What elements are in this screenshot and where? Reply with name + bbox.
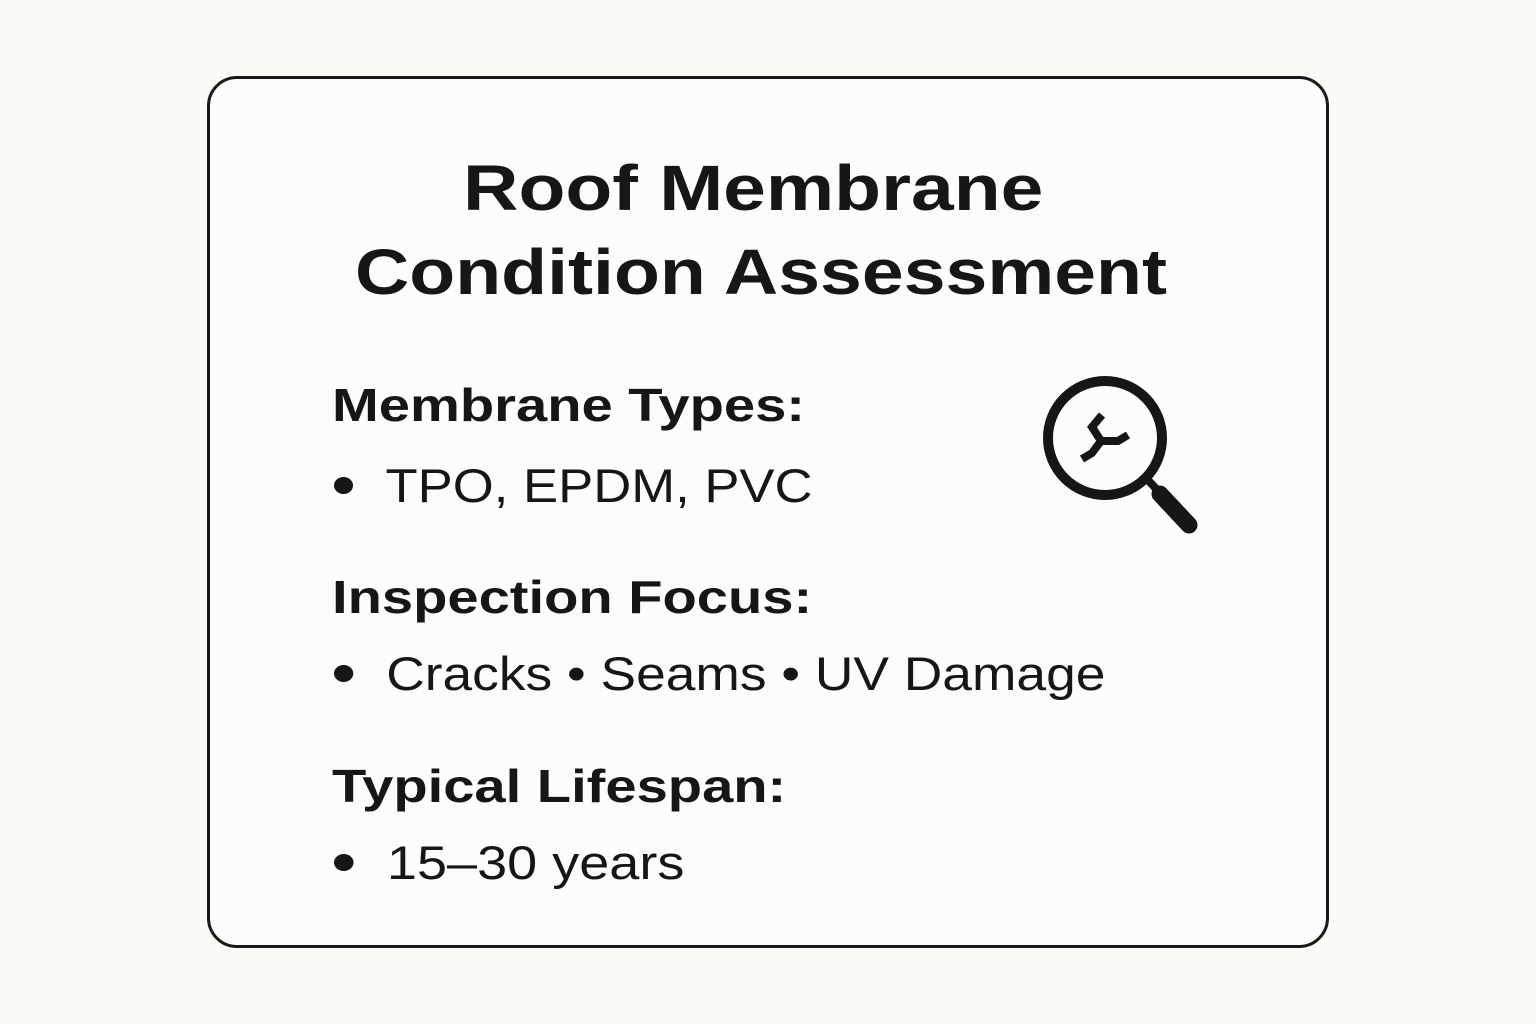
- heading: typical lifespan: Typical Lifespan:: [332, 760, 786, 812]
- text: Condition Assessment: [355, 236, 1167, 308]
- bullet: inspection focus: Cracks • Seams • UV Damage: [386, 647, 1105, 700]
- bullet: lifespan: 15–30 years: [387, 836, 684, 889]
- text: Roof Membrane: [463, 152, 1043, 224]
- bullet: membrane types: TPO, EPDM, PVC: [386, 459, 813, 512]
- heading: inspection focus: Inspection Focus:: [332, 571, 812, 623]
- panel: card: [207, 76, 1329, 948]
- title: [355, 152, 1167, 308]
- heading: membrane types: Membrane Types:: [332, 379, 805, 431]
